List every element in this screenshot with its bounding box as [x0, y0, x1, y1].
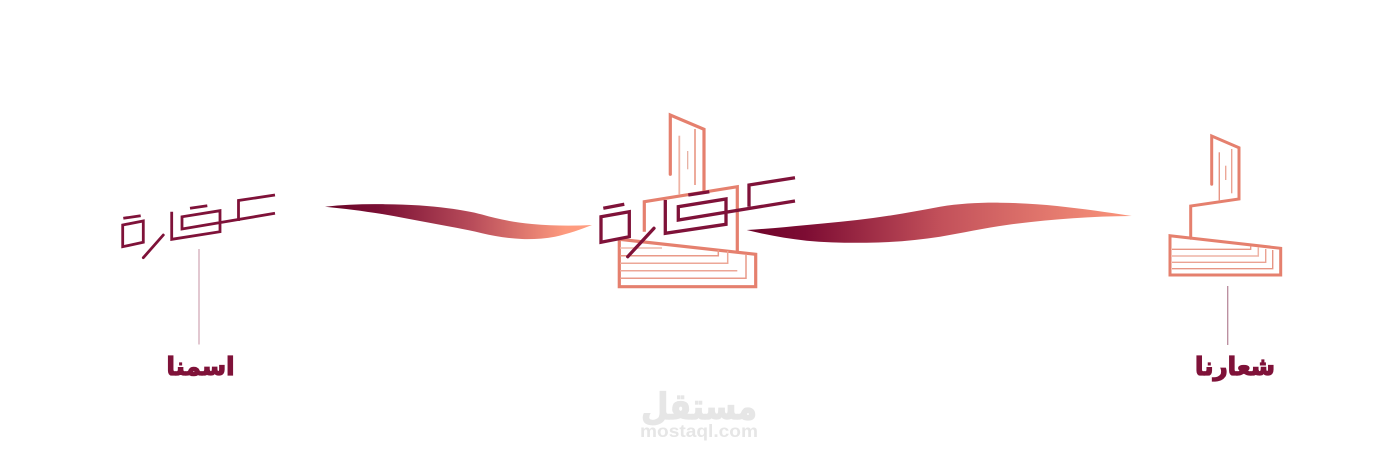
- connector line: name: [198, 249, 200, 344]
- logo mark: tower: [1191, 136, 1239, 238]
- watermark: latin wordmark: mostaql.com: [640, 421, 758, 441]
- arrow: swoosh name to combined mark: [325, 204, 592, 239]
- logotype: large wordmark: [601, 178, 795, 257]
- connector line: logo: [1227, 286, 1229, 345]
- logotype: small wordmark: [123, 195, 275, 258]
- emblem: stepped base: [619, 239, 756, 287]
- emblem: tower: [670, 115, 704, 194]
- panel: our name: [123, 195, 275, 381]
- label: our logo: شعارنا: [1195, 352, 1275, 381]
- watermark: arabic wordmark: مستقل: [641, 387, 757, 428]
- logo mark: stepped base: [1170, 236, 1281, 275]
- label: our name: اسمنا: [166, 352, 234, 381]
- emblem: building: [644, 187, 737, 252]
- arrow: swoosh combined mark to logo: [747, 203, 1132, 243]
- panel: combined emblem: [601, 115, 795, 287]
- panel: our logo: [1170, 136, 1281, 381]
- watermark: [640, 387, 758, 441]
